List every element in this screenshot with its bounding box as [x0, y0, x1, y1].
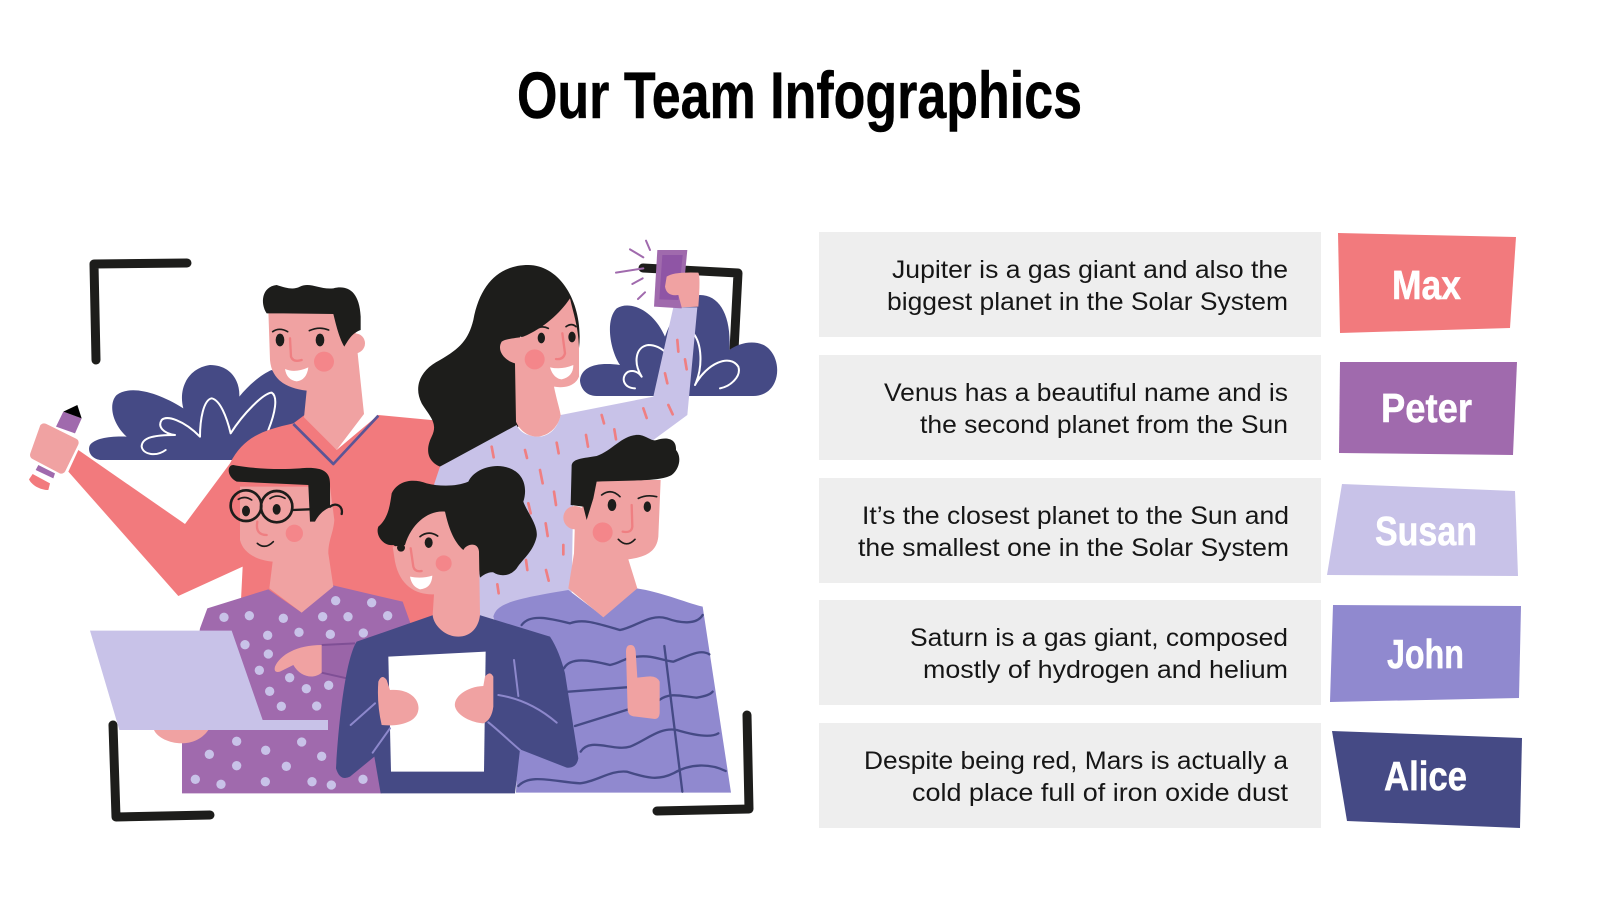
jacket creases: [351, 660, 557, 753]
panel: Peter description: [819, 355, 1321, 460]
phone flash rays: [616, 241, 650, 299]
pointing hand: [275, 645, 322, 677]
row: Peter: [819, 355, 1517, 460]
hand: [665, 272, 699, 307]
long hair: [418, 265, 580, 467]
text: Max description: Jupiter is a gas giant and also the: [892, 256, 1288, 284]
person: man in periwinkle striped sweater: [493, 435, 731, 793]
face and neck: [500, 298, 579, 437]
text: Max description: [887, 256, 1288, 316]
text: Max description: biggest planet in the Solar System: [887, 288, 1288, 316]
illustration: team of five people: [29, 241, 777, 817]
text: Alice description: cold place full of iron oxide dust: [912, 779, 1288, 807]
hair, sweater, phone: [418, 241, 699, 620]
head with glasses: [229, 465, 342, 613]
text: Susan description: It’s the closest planet to the Sun and: [862, 502, 1289, 530]
sweater and raised arm: [433, 307, 697, 620]
panel: Susan description: [819, 478, 1321, 583]
bracket: top left: [94, 263, 187, 360]
polka dot shirt: [90, 585, 412, 793]
tag: Max: Max: [1392, 262, 1461, 308]
row: Alice: [819, 723, 1522, 828]
text: Susan description: the smallest one in the Solar System: [858, 534, 1289, 562]
tag: Max: [1338, 233, 1516, 333]
head and neck: [268, 310, 364, 450]
bush: left: [89, 365, 308, 460]
sleeve: [322, 643, 355, 678]
row: John: [819, 600, 1521, 705]
tag: Peter: Peter: [1381, 385, 1472, 431]
laptop: [90, 631, 328, 730]
tag: Alice: [1332, 731, 1522, 828]
hair: [263, 285, 361, 347]
sweater dashes: [492, 340, 687, 593]
row: Max: [819, 232, 1516, 337]
text: John description: Saturn is a gas giant, composed: [910, 624, 1288, 652]
tag: Alice: Alice: [1384, 753, 1467, 799]
text: Susan description: [858, 502, 1289, 562]
hand under laptop: [154, 730, 208, 743]
tag: Peter: [1339, 362, 1517, 455]
tag: John: John: [1387, 631, 1464, 677]
tag: Susan: [1327, 484, 1518, 576]
sweater: [493, 588, 731, 793]
head: [563, 435, 679, 617]
bracket: top right: [643, 268, 738, 350]
panel: John description: [819, 600, 1321, 705]
person: woman with curly hair and paper: [336, 466, 578, 793]
text: Peter description: Venus has a beautiful name and is: [884, 379, 1288, 407]
panel: Alice description: [819, 723, 1321, 828]
phone: [654, 250, 687, 308]
person: man with glasses and laptop: [90, 465, 412, 793]
text: Alice description: [864, 747, 1288, 807]
navy jacket: [336, 615, 578, 793]
text: John description: [910, 624, 1288, 684]
person: woman holding up phone: [418, 241, 699, 620]
icon: fist holding pencil: [29, 405, 82, 490]
text: Peter description: the second planet from the Sun: [920, 411, 1288, 439]
shirt and raised arm: [68, 413, 467, 653]
text: Alice description: Despite being red, Mars is actually a: [864, 747, 1288, 775]
panel: Max description: [819, 232, 1321, 337]
bush: right: [580, 295, 777, 396]
left thumb hand: [378, 677, 419, 725]
person: man in red shirt: [68, 285, 467, 653]
bracket: bottom left: [113, 725, 210, 817]
text: John description: mostly of hydrogen and helium: [923, 656, 1288, 684]
head and curly hair: [378, 466, 537, 637]
title: Our Team Infographics: [517, 58, 1082, 132]
tag: John: [1330, 605, 1521, 702]
row: Susan: [819, 478, 1518, 583]
right thumb hand: [455, 673, 493, 723]
bracket: bottom right: [657, 715, 749, 811]
text: Peter description: [884, 379, 1288, 439]
collar: [293, 416, 378, 464]
tag: Susan: Susan: [1375, 508, 1477, 554]
paper: [388, 652, 486, 772]
